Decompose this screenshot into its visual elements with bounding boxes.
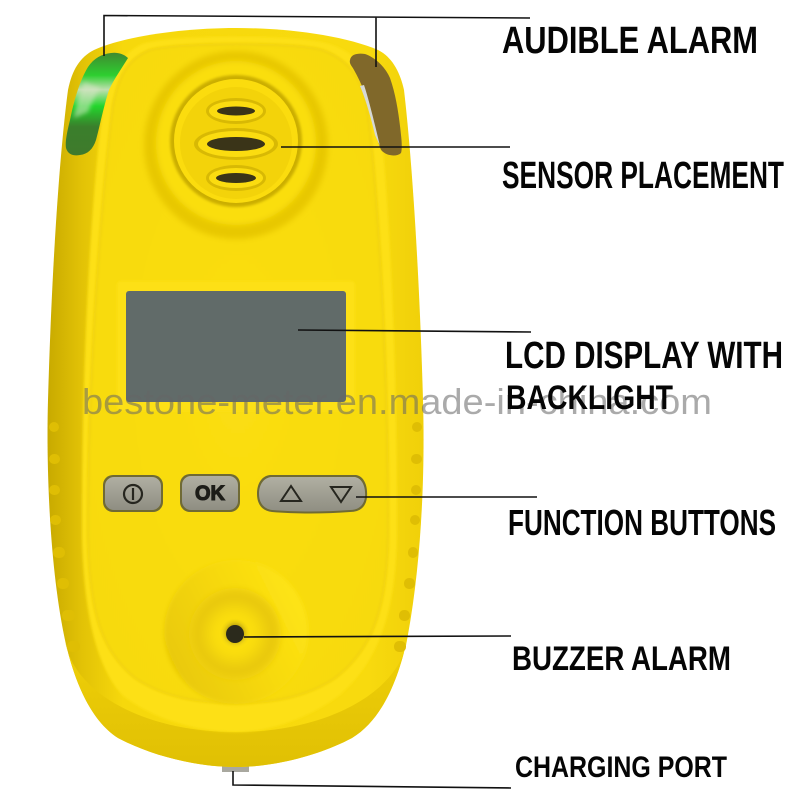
buzzer — [164, 560, 308, 704]
sensor slot: middle — [194, 128, 278, 160]
left LED: green alarm light — [66, 53, 128, 155]
sensor slot: top — [206, 98, 266, 124]
LCD display — [117, 281, 355, 411]
arrow buttons — [257, 475, 367, 514]
housing outline — [48, 28, 424, 767]
label: buzzer alarm: BUZZER ALARM — [512, 640, 731, 678]
callout line: charging port — [233, 771, 511, 788]
sensor housing — [144, 51, 328, 239]
charging port — [222, 766, 249, 772]
side grip ribs — [49, 422, 422, 652]
sensor slot: bottom — [206, 165, 266, 191]
device body — [48, 28, 424, 772]
callout line: LCD display — [298, 330, 531, 332]
callout lines: audible alarm — [104, 16, 530, 67]
callout line: sensor placement — [281, 146, 510, 148]
right LED: unlit alarm light — [350, 54, 402, 155]
label: charging port: CHARGING PORT — [515, 751, 727, 784]
lower shading — [65, 640, 407, 767]
bright rim band — [82, 36, 397, 732]
label: backlight: BACKLIGHT — [506, 379, 673, 417]
OK button: OK — [195, 482, 225, 505]
callout line: buzzer alarm — [244, 636, 511, 637]
OK button — [180, 474, 240, 512]
callout line: function buttons — [356, 496, 537, 498]
power button — [103, 475, 163, 512]
front face — [88, 44, 388, 703]
watermark: bestone-meter.en.made-in-china.com — [82, 381, 712, 422]
